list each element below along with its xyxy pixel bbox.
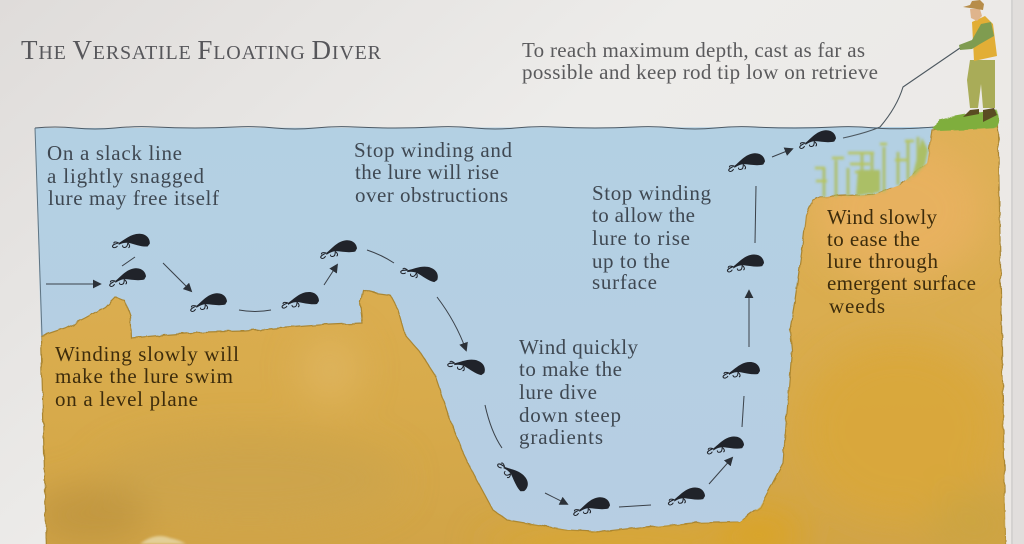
text block: wind quickly: gradients [519,425,603,449]
lures [108,129,837,516]
hat [963,0,984,10]
lure 8 [497,456,531,495]
lure 7 [447,351,488,380]
arrow 1 [46,283,100,285]
fishing rod and line [843,48,960,138]
lure 1 [112,231,151,251]
page edge [1012,0,1024,544]
text block: wind slowly [827,205,976,318]
lure 6 [400,258,441,287]
lure 3 [189,292,228,312]
lure 14 [727,152,766,172]
arrow 11 [709,458,732,484]
text block: winding slowly [55,342,239,411]
text block: wind slowly: lure through [827,249,938,273]
text block: wind quickly: to make the [519,357,622,381]
segment 10 [619,505,651,507]
boots [963,108,997,122]
arrow 7 [437,297,466,350]
text block: winding slowly: make the lure swim [55,364,233,388]
text block: casting advice [522,38,878,84]
text block: stop winding, surface: Stop winding [592,181,712,205]
text block: wind quickly: Wind quickly [519,335,638,359]
trousers [967,60,995,108]
segment 4 [239,310,271,312]
segment 8 [485,405,502,448]
lure 15 [798,129,837,149]
text block: wind slowly: emergent surface [827,271,976,295]
arrow 9 [545,493,567,504]
text block: stop winding, rise: over obstructions [355,183,508,207]
text block: stop winding, rise: Stop winding and [354,138,512,162]
lure 5 [319,239,358,259]
text block: slack line: On a slack line [47,141,182,165]
text block: stop winding, surface: to allow the [592,203,695,227]
arrow 5 [324,265,337,285]
lure 12 [723,362,760,378]
text block: slack line [47,141,219,210]
text block: winding slowly: Winding slowly will [55,342,239,366]
segment 2 [122,257,135,266]
text block: stop winding, surface: up to the [592,249,670,273]
text block: stop winding, rise: the lure will rise [355,160,499,184]
head [970,9,982,21]
title: THE VERSATILE FLOATING DIVER [21,35,382,65]
arrow 13 [748,291,750,347]
text block: winding slowly: on a level plane [55,387,198,411]
text block: casting advice: To reach maximum depth, cast as far as [522,38,865,62]
arrow 3 [163,263,191,291]
lure 2 [108,267,147,287]
segment 6 [367,250,394,263]
water surface line [35,127,935,129]
lure 10 [668,487,705,505]
text block: stop winding, rise [354,138,512,207]
lure 13 [727,254,764,272]
lure 4 [282,292,319,308]
vest [972,16,997,61]
text block: slack line: lure may free itself [48,186,219,210]
text block: casting advice: possible and keep rod tip low on retrieve [522,60,878,84]
sleeve [959,22,994,50]
lure 11 [707,436,744,454]
text block: stop winding, surface [592,181,712,294]
left water edge [35,128,42,336]
water [35,127,935,544]
text block: wind slowly: weeds [829,294,885,318]
arrow 15 [772,149,792,157]
text block: wind quickly [519,335,638,449]
angler figure [843,0,997,138]
lure 9 [572,496,611,516]
segment 14 [755,186,756,243]
text block: wind quickly: lure dive [519,380,597,404]
text block: wind slowly: Wind slowly [827,205,938,229]
emergent weeds [815,137,928,197]
text block: wind slowly: to ease the [827,227,920,251]
lure path arrows [46,149,792,507]
text block: stop winding, surface: surface [592,270,657,294]
text block: wind quickly: down steep [519,403,621,427]
ground: river bed [30,126,1020,544]
text block: stop winding, surface: lure to rise [592,226,690,250]
grass bank [932,110,999,131]
text block: slack line: a lightly snagged [47,164,204,188]
segment 12 [742,396,744,427]
